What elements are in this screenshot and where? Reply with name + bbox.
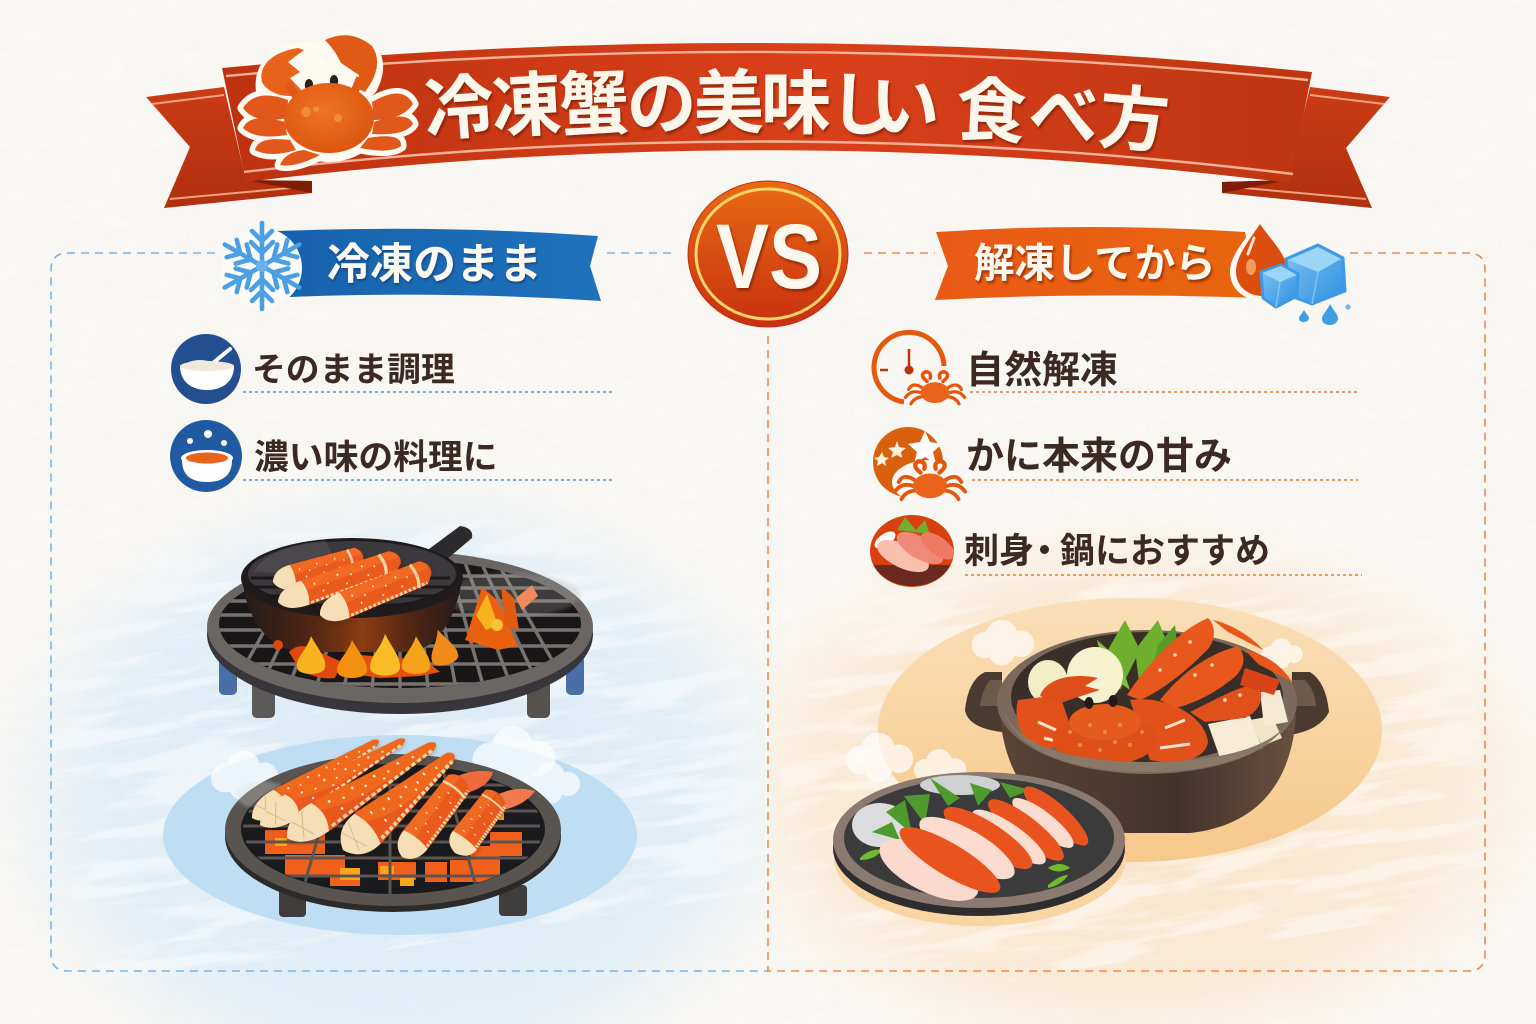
icon: water drop and ice — [1230, 220, 1351, 325]
ribbon main band — [222, 43, 1312, 183]
pot crab claws — [1127, 618, 1292, 722]
list row: natural sweetness — [873, 427, 1358, 504]
sashimi plate — [833, 772, 1125, 916]
front rim overlay — [1002, 704, 1296, 772]
crab legs in pan — [270, 545, 436, 628]
text: 刺身 — [964, 532, 1034, 571]
blue watercolor wash — [24, 501, 765, 1024]
text: 濃い味の料理に — [254, 438, 498, 477]
small ice cube — [1261, 265, 1298, 307]
blue shadow ellipse — [163, 735, 637, 935]
icon: stars and crab — [873, 427, 968, 504]
heading text: frozen: 冷凍のまま — [327, 241, 542, 289]
illustration: hotpot and sashimi — [833, 598, 1382, 926]
text: そのまま調理 — [252, 351, 455, 389]
large ice cube — [1286, 245, 1345, 304]
greens — [1097, 620, 1178, 690]
grill legs — [219, 655, 584, 718]
illustration: pan on grill — [207, 526, 593, 718]
heading ribbon: thawed — [935, 227, 1258, 300]
panel: thawed outline — [768, 253, 1485, 971]
orange watercolor wash — [771, 540, 1524, 1024]
grill — [207, 551, 593, 714]
pot rim — [997, 630, 1297, 774]
grill — [225, 754, 561, 912]
grill legs — [279, 885, 527, 917]
VS text: VS — [716, 206, 822, 308]
title: 冷凍蟹の美味しい食べ方 — [422, 64, 1172, 162]
icon: bowl and spoon — [171, 334, 241, 404]
whole crab in pot — [1017, 676, 1208, 765]
frying pan — [241, 526, 472, 652]
text: 自然解凍 — [966, 350, 1118, 392]
text: 鍋におすすめ — [1060, 532, 1270, 571]
handles — [965, 672, 1002, 732]
VS badge — [688, 181, 848, 327]
hotpot — [965, 618, 1329, 833]
coals — [265, 812, 522, 886]
heading ribbon: frozen — [252, 229, 601, 301]
text: ・ — [1027, 532, 1062, 571]
droplets — [1322, 304, 1338, 325]
heading text: thawed: 解凍してから — [974, 240, 1216, 286]
icon: soup bowl — [170, 420, 242, 492]
icon: sashimi — [870, 515, 954, 587]
sashimi slices — [871, 779, 1095, 913]
list row: rich flavored dishes — [170, 420, 612, 492]
icon: snowflake — [219, 223, 305, 309]
steam — [846, 620, 1303, 787]
crab legs on grill — [245, 728, 535, 866]
orange ground ellipses — [834, 598, 1382, 926]
illustration: legs on grill — [163, 726, 637, 935]
title ribbon — [146, 43, 1390, 208]
ribbon tail right — [1222, 87, 1390, 208]
shaved ice — [852, 803, 908, 847]
shiso leaves — [860, 778, 1070, 888]
icon: clock and crab — [874, 332, 969, 410]
text: かに本来の甘み — [966, 436, 1232, 478]
ribbon tail left — [146, 87, 312, 208]
pot body — [1000, 715, 1296, 833]
tofu — [1208, 690, 1288, 758]
steam — [211, 726, 580, 804]
onion — [1067, 647, 1123, 703]
flames — [273, 585, 538, 678]
list row: natural thawing — [874, 332, 1360, 410]
icon: title crab — [243, 31, 413, 166]
list row: cook as is — [171, 334, 612, 404]
list row: sashimi and hotpot — [870, 515, 1362, 590]
panel: frozen outline — [51, 253, 768, 971]
